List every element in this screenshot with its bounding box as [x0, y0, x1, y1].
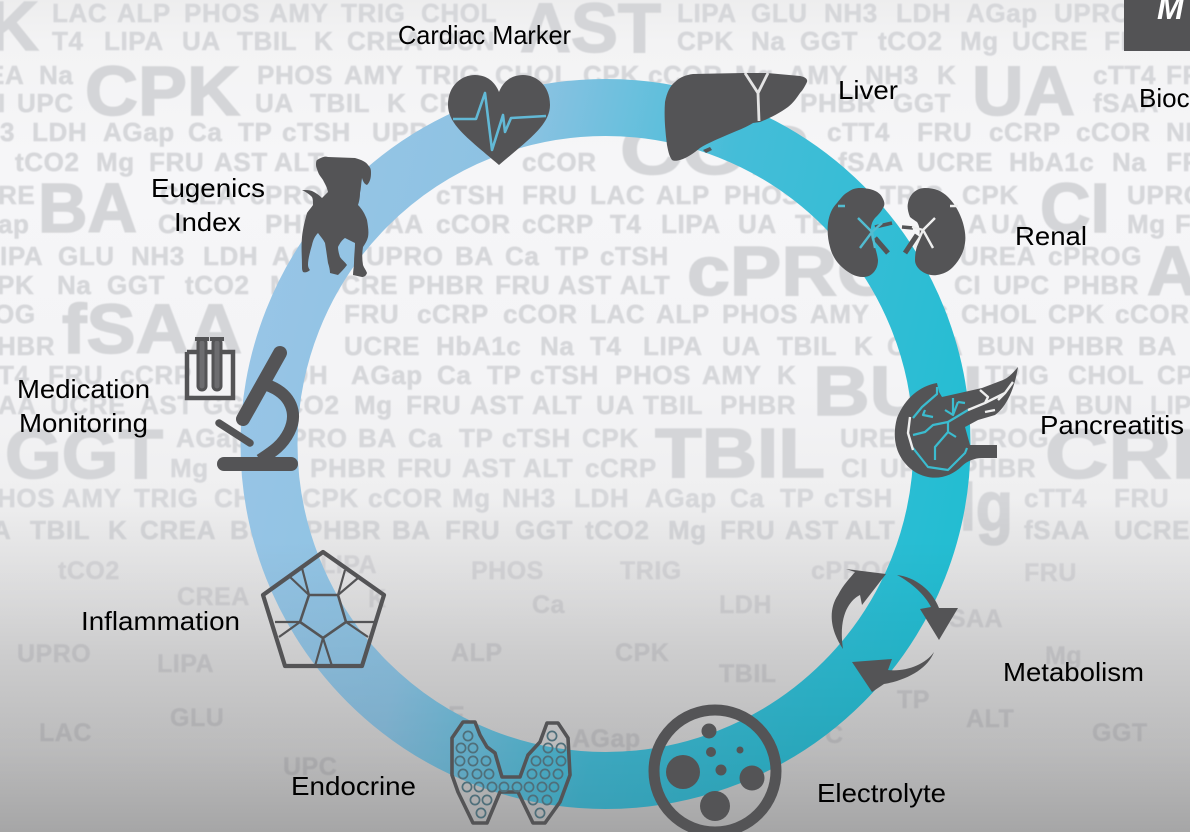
background word cloud of analyte abbreviations: K — [937, 60, 956, 90]
background word cloud of analyte abbreviations: CPK — [962, 180, 1019, 210]
background word cloud of analyte abbreviations: GGT — [203, 390, 261, 420]
background word cloud of analyte abbreviations: BA — [38, 169, 137, 247]
background word cloud of analyte abbreviations: LIPA — [643, 331, 703, 361]
background word cloud of analyte abbreviations: LDH — [203, 241, 258, 271]
background word cloud of analyte abbreviations: FRU — [917, 117, 972, 147]
background word cloud of analyte abbreviations: CPK — [302, 483, 359, 513]
background word cloud of analyte abbreviations: CHOL — [1068, 360, 1144, 390]
background word cloud of analyte abbreviations: cCRP — [989, 117, 1061, 147]
icon: microscope and test tubes (medication monitoring) — [187, 339, 298, 471]
background word cloud of analyte abbreviations: PHBR — [1063, 270, 1139, 300]
background word cloud of analyte abbreviations: LIPA — [661, 209, 721, 239]
background word cloud of analyte abbreviations: cCOR — [1076, 117, 1151, 147]
background word cloud of analyte abbreviations: NH3 — [131, 241, 185, 271]
background word cloud of analyte abbreviations: TRIG — [985, 360, 1050, 390]
background word cloud of analyte abbreviations: AST — [558, 270, 612, 300]
background word cloud of analyte abbreviations: CREA — [887, 331, 963, 361]
background word cloud of analyte abbreviations: CPK — [615, 639, 669, 667]
background word cloud of analyte abbreviations: Mg — [1045, 642, 1082, 670]
background word cloud of analyte abbreviations: Ca — [408, 423, 442, 453]
background word cloud of analyte abbreviations: UCRE — [917, 147, 993, 177]
background word cloud of analyte abbreviations: AGap — [176, 423, 248, 453]
icon: liver — [665, 73, 807, 161]
background word cloud of analyte abbreviations: AGap — [103, 117, 175, 147]
background word cloud of analyte abbreviations: PHOS — [724, 180, 800, 210]
background word cloud of analyte abbreviations: Mg — [452, 483, 491, 513]
background word cloud of analyte abbreviations: Na — [39, 60, 73, 90]
background word cloud of analyte abbreviations: LIPA — [104, 26, 164, 56]
background word cloud of analyte abbreviations: Mg — [96, 147, 135, 177]
background word cloud of analyte abbreviations: UPC — [17, 88, 74, 118]
background word cloud of analyte abbreviations: fSAA — [838, 147, 904, 177]
background word cloud of analyte abbreviations: ALP — [656, 299, 710, 329]
label: renal: Renal — [1015, 221, 1087, 251]
background word cloud of analyte abbreviations: CI — [158, 209, 185, 239]
background word cloud of analyte abbreviations: T4 — [590, 331, 622, 361]
background word cloud of analyte abbreviations: ALP — [451, 639, 502, 667]
label: metabolism: Metabolism — [1003, 657, 1144, 687]
background word cloud of analyte abbreviations: PHBR — [720, 390, 796, 420]
background word cloud of analyte abbreviations: CREA — [347, 26, 423, 56]
background word cloud of analyte abbreviations: FRU — [495, 270, 550, 300]
background word cloud of analyte abbreviations: NH3 — [865, 60, 919, 90]
background word cloud of analyte abbreviations: PHBR — [305, 515, 381, 545]
header box, top right — [1124, 0, 1190, 51]
label: medication monitoring — [17, 374, 150, 438]
background word cloud of analyte abbreviations: GGT — [800, 26, 858, 56]
background word cloud of analyte abbreviations: K — [368, 585, 387, 613]
background word cloud of analyte abbreviations: GGT — [893, 88, 951, 118]
background word cloud of analyte abbreviations: tCO2 — [275, 390, 340, 420]
background word cloud of analyte abbreviations: TBIL — [719, 660, 777, 688]
background word cloud of analyte abbreviations: cCOR — [436, 209, 511, 239]
label: eugenics index — [151, 173, 265, 237]
background word cloud of analyte abbreviations: cCRP — [585, 453, 657, 483]
background word cloud of analyte abbreviations: AGap — [272, 241, 344, 271]
icon: electrolyte circle with particles — [654, 710, 776, 832]
background word cloud of analyte abbreviations: CREA — [420, 88, 496, 118]
background word cloud of analyte abbreviations: fSAA — [1093, 88, 1159, 118]
background word cloud of analyte abbreviations: FRU — [48, 360, 103, 390]
label: inflammation: Inflammation — [81, 606, 240, 636]
background word cloud of analyte abbreviations: FRU — [149, 147, 204, 177]
background word cloud of analyte abbreviations: FRU — [720, 515, 775, 545]
background word cloud of analyte abbreviations: E — [448, 702, 465, 730]
background word cloud of analyte abbreviations: Na — [751, 26, 785, 56]
background word cloud of analyte abbreviations: CI — [1040, 169, 1110, 247]
background word cloud of analyte abbreviations: PHOS — [615, 360, 691, 390]
background word cloud of analyte abbreviations: GLU — [170, 704, 224, 732]
background word cloud of analyte abbreviations: Na — [57, 270, 91, 300]
background word cloud of analyte abbreviations: AMY — [810, 299, 870, 329]
icon: pancreas — [895, 367, 1018, 478]
background word cloud of analyte abbreviations: LDH — [719, 591, 772, 619]
background word cloud of analyte abbreviations: IPA — [0, 241, 43, 271]
background word cloud of analyte abbreviations: PHBR — [265, 209, 341, 239]
background word cloud of analyte abbreviations: K — [387, 88, 406, 118]
background word cloud of analyte abbreviations: K — [854, 331, 873, 361]
background word cloud of analyte abbreviations: K — [314, 26, 333, 56]
background word cloud of analyte abbreviations: TBIL — [795, 209, 855, 239]
label: cardiac marker: Cardiac Marker — [398, 20, 571, 50]
background word cloud of analyte abbreviations: GLU — [58, 241, 115, 271]
background word cloud of analyte abbreviations: Mg — [1127, 209, 1166, 239]
background word cloud of analyte abbreviations: cTSH — [530, 360, 599, 390]
background word cloud of analyte abbreviations: cPROG — [1048, 241, 1142, 271]
background word cloud of analyte abbreviations: AA — [385, 209, 424, 239]
background word cloud of analyte abbreviations: UA — [255, 88, 294, 118]
background word cloud of analyte abbreviations: cTSH — [282, 117, 351, 147]
background word cloud of analyte abbreviations: UCRE — [1012, 26, 1088, 56]
background word cloud of analyte abbreviations: PHBR — [960, 453, 1036, 483]
background word cloud of analyte abbreviations: GGT — [107, 270, 165, 300]
background word cloud of analyte abbreviations: FRU — [406, 390, 461, 420]
background word cloud of analyte abbreviations: cPROG — [811, 557, 901, 585]
background word cloud of analyte abbreviations: Ca — [532, 591, 566, 619]
background word cloud of analyte abbreviations: GGT — [5, 415, 163, 493]
background word cloud of analyte abbreviations: UA — [722, 331, 761, 361]
background word cloud of analyte abbreviations: TP — [238, 117, 272, 147]
label: electrolyte: Electrolyte — [817, 778, 946, 808]
background word cloud of analyte abbreviations: CREA — [177, 583, 250, 611]
background word cloud of analyte abbreviations: PHOS — [257, 60, 333, 90]
label: biochemistry, cut off at page edge: Bioc — [1139, 83, 1190, 113]
background word cloud of analyte abbreviations: cPRO — [687, 232, 897, 310]
background word cloud of analyte abbreviations: BUN — [1075, 390, 1133, 420]
label: eugenics index: Index — [174, 207, 241, 237]
background word cloud of analyte abbreviations: TBIL — [643, 390, 703, 420]
background word cloud of analyte abbreviations: tCO2 — [185, 270, 250, 300]
background word cloud of analyte abbreviations: UREA — [840, 423, 916, 453]
background word cloud of analyte abbreviations: ALP — [656, 180, 710, 210]
background word cloud of analyte abbreviations: Mg — [925, 467, 1013, 545]
background word cloud of analyte abbreviations: CREA — [140, 515, 216, 545]
background word cloud of analyte abbreviations: K — [108, 515, 127, 545]
background word cloud of analyte abbreviations: FRU — [445, 515, 500, 545]
background word cloud of analyte abbreviations: Mg — [735, 60, 774, 90]
label: medication monitoring: Monitoring — [19, 408, 148, 438]
background word cloud of analyte abbreviations: Ca — [505, 241, 539, 271]
background word cloud of analyte abbreviations: UREA — [960, 241, 1036, 271]
background word cloud of analyte abbreviations: NH3 — [502, 483, 556, 513]
background word cloud of analyte abbreviations: TBIL — [777, 331, 837, 361]
background word cloud of analyte abbreviations: ALT — [620, 270, 670, 300]
background word cloud of analyte abbreviations: Na — [540, 331, 574, 361]
background word cloud of analyte abbreviations: LIPA — [320, 551, 377, 579]
icon: cycling arrows (metabolism) — [832, 569, 958, 692]
background word cloud of analyte abbreviations: TP — [780, 483, 814, 513]
background word cloud of analyte abbreviations: BUN — [437, 26, 495, 56]
background word cloud of analyte abbreviations: COR — [620, 111, 810, 189]
background word cloud of analyte abbreviations: cCRP — [522, 209, 594, 239]
background word cloud of analyte abbreviations: cTT4 — [827, 117, 890, 147]
background word cloud of analyte abbreviations: ALT — [845, 515, 895, 545]
background word cloud of analyte abbreviations: UPC — [283, 753, 337, 781]
background word cloud of analyte abbreviations: UA — [182, 26, 221, 56]
ring: circular blue-to-teal band — [269, 108, 942, 780]
background word cloud of analyte abbreviations: AST — [462, 453, 516, 483]
label: pancreatitis: Pancreatitis — [1040, 410, 1184, 440]
background word cloud of analyte abbreviations: cTSH — [502, 423, 571, 453]
background word cloud of analyte abbreviations: Ca — [437, 360, 471, 390]
label: eugenics index: Eugenics — [151, 173, 265, 203]
background word cloud of analyte abbreviations: ALT — [966, 705, 1014, 733]
background word cloud of analyte abbreviations: Mg — [960, 26, 999, 56]
background word cloud of analyte abbreviations: AST — [214, 147, 268, 177]
background word cloud of analyte abbreviations: T4 — [52, 26, 84, 56]
background word cloud of analyte abbreviations: CRE — [1045, 415, 1190, 493]
background word cloud of analyte abbreviations: CHOL — [214, 483, 290, 513]
label: liver: Liver — [838, 75, 898, 105]
background word cloud of analyte abbreviations: UA — [972, 52, 1075, 130]
background word cloud of analyte abbreviations: fSAA — [62, 290, 242, 368]
background word cloud of analyte abbreviations: BA — [455, 241, 494, 271]
background word cloud of analyte abbreviations: Mg — [668, 515, 707, 545]
background word cloud of analyte abbreviations: GGT — [515, 515, 573, 545]
background word cloud of analyte abbreviations: FRU — [1114, 483, 1169, 513]
background word cloud of analyte abbreviations: AMY — [702, 360, 762, 390]
background word cloud of analyte abbreviations: Na — [1112, 147, 1146, 177]
background word cloud of analyte abbreviations: cCRP — [417, 299, 489, 329]
background word cloud of analyte abbreviations: cTSH — [824, 483, 893, 513]
background word cloud of analyte abbreviations: cCOR — [1115, 299, 1190, 329]
background word cloud of analyte abbreviations: LAC — [39, 719, 92, 747]
background word cloud of analyte abbreviations: UA — [991, 209, 1030, 239]
background word cloud of analyte abbreviations: CI — [841, 453, 868, 483]
background word cloud of analyte abbreviations: TRIG — [885, 299, 950, 329]
background word cloud of analyte abbreviations: AST — [785, 515, 839, 545]
background word cloud of analyte abbreviations: LDH — [32, 117, 87, 147]
icon: pentagon cell network (inflammation) — [263, 552, 384, 666]
background word cloud of analyte abbreviations: HbA1c — [436, 331, 521, 361]
background word cloud of analyte abbreviations: cCOR — [522, 147, 597, 177]
background word cloud of analyte abbreviations: AMY — [344, 60, 404, 90]
background word cloud of analyte abbreviations: BA — [358, 423, 397, 453]
background word cloud of analyte abbreviations: K — [777, 360, 796, 390]
background word cloud of analyte abbreviations: 3 — [0, 117, 15, 147]
background word cloud of analyte abbreviations: BUN — [230, 515, 288, 545]
background word cloud of analyte abbreviations: UCRE — [322, 270, 398, 300]
background word cloud of analyte abbreviations: BA — [1138, 331, 1177, 361]
background word cloud of analyte abbreviations: UCRE — [1114, 515, 1190, 545]
background word cloud of analyte abbreviations: fSAA — [940, 605, 1003, 633]
background word cloud of analyte abbreviations: ALT — [523, 453, 573, 483]
background word cloud of analyte abbreviations: AST — [470, 390, 524, 420]
background word cloud of analyte abbreviations: FRU — [344, 299, 399, 329]
background word cloud of analyte abbreviations: cTSH — [436, 180, 505, 210]
background word cloud of analyte abbreviations: cCRP — [120, 360, 192, 390]
background word cloud of analyte abbreviations: Ca — [730, 483, 764, 513]
background word cloud of analyte abbreviations: UCRE — [344, 331, 420, 361]
background word cloud of analyte abbreviations: TBIL — [237, 26, 297, 56]
background word cloud of analyte abbreviations: cTSH — [600, 241, 669, 271]
background word cloud of analyte abbreviations: cCOR — [368, 483, 443, 513]
icon: thyroid gland (endocrine) — [452, 722, 570, 823]
background word cloud of analyte abbreviations: Mg — [354, 390, 393, 420]
background word cloud of analyte abbreviations: fSAA — [1024, 515, 1090, 545]
background word cloud of analyte abbreviations: TBIL — [310, 88, 370, 118]
background word cloud of analyte abbreviations: Mg — [170, 453, 209, 483]
background word cloud of analyte abbreviations: PHBR — [408, 270, 484, 300]
background word cloud of analyte abbreviations: HbA1c — [1009, 147, 1094, 177]
background word cloud of analyte abbreviations: LAC — [590, 180, 645, 210]
background word cloud of analyte abbreviations: CPK — [583, 60, 640, 90]
icon: kidneys (renal) — [828, 188, 965, 277]
background word cloud of analyte abbreviations: UPRO — [17, 640, 91, 668]
background word cloud of analyte abbreviations: CHOL — [961, 299, 1037, 329]
label: medication monitoring: Medication — [17, 374, 150, 404]
background word cloud of analyte abbreviations: cTT4 — [1024, 483, 1087, 513]
background word cloud of analyte abbreviations: tCO2 — [15, 147, 80, 177]
background word cloud of analyte abbreviations: cCOR — [648, 60, 723, 90]
background word cloud of analyte abbreviations: T4 — [610, 209, 642, 239]
background word cloud of analyte abbreviations: tCO2 — [585, 515, 650, 545]
background word cloud of analyte abbreviations: UREA — [990, 390, 1066, 420]
icon: dog silhouette (eugenics index) — [302, 157, 371, 277]
background word cloud of analyte abbreviations: UPRO — [366, 241, 444, 271]
background word cloud of analyte abbreviations: FRU — [1024, 559, 1077, 587]
background word cloud of analyte abbreviations: AGap — [351, 360, 423, 390]
background word cloud of analyte abbreviations: AMY — [62, 483, 122, 513]
background word cloud of analyte abbreviations: UPC — [880, 453, 937, 483]
background word cloud of analyte abbreviations: UA — [738, 209, 777, 239]
background word cloud of analyte abbreviations: TBIL — [30, 515, 90, 545]
background word cloud of analyte abbreviations: PHBR — [1048, 331, 1124, 361]
background word cloud of analyte abbreviations: LDH — [273, 360, 328, 390]
background word cloud of analyte abbreviations: LIPA — [157, 650, 214, 678]
background word cloud of analyte abbreviations: ALT — [532, 390, 582, 420]
background word cloud of analyte abbreviations: cPROG — [250, 180, 344, 210]
background word cloud of analyte abbreviations: BUN — [813, 352, 983, 430]
background word cloud of analyte abbreviations: A — [968, 209, 987, 239]
background word cloud of analyte abbreviations: TRIG — [416, 60, 481, 90]
background word cloud of analyte abbreviations: TRIG — [620, 557, 682, 585]
background word cloud of analyte abbreviations: TRIG — [134, 483, 199, 513]
background word cloud of analyte abbreviations: tCO2 — [58, 557, 120, 585]
background word cloud of analyte abbreviations: GGT — [1092, 719, 1148, 747]
background word cloud of analyte abbreviations: CPK — [85, 52, 240, 130]
label: endocrine: Endocrine — [291, 771, 416, 801]
background word cloud of analyte abbreviations: PHBR — [310, 453, 386, 483]
background word cloud of analyte abbreviations: AGap — [572, 725, 641, 753]
background word cloud of analyte abbreviations: LDH — [574, 483, 629, 513]
icon: heart with pulse (cardiac marker) — [448, 75, 550, 165]
background word cloud of analyte abbreviations: FRU — [397, 453, 452, 483]
background word cloud of analyte abbreviations: CPK — [677, 26, 734, 56]
background word cloud of analyte abbreviations: TRIG — [880, 180, 945, 210]
background word cloud of analyte abbreviations: PHBR — [800, 88, 876, 118]
background word cloud of analyte abbreviations: AMY — [788, 60, 848, 90]
background word cloud of analyte abbreviations: Ca — [188, 117, 222, 147]
background word cloud of analyte abbreviations: PHOS — [722, 299, 798, 329]
background word cloud of analyte abbreviations: Mg — [270, 270, 309, 300]
background word cloud of analyte abbreviations: FRU — [1104, 26, 1159, 56]
background word cloud of analyte abbreviations: UA — [596, 390, 635, 420]
background word cloud of analyte abbreviations: cCOR — [503, 299, 578, 329]
background word cloud of analyte abbreviations: AGap — [645, 483, 717, 513]
background word cloud of analyte abbreviations: UPRO — [372, 117, 450, 147]
background word cloud of analyte abbreviations: CPK — [582, 423, 639, 453]
background word cloud of analyte abbreviations: TP — [897, 686, 930, 714]
background word cloud of analyte abbreviations: UCRE — [50, 390, 126, 420]
background word cloud of analyte abbreviations: LAC — [590, 299, 645, 329]
background word cloud of analyte abbreviations: UPRO — [270, 423, 348, 453]
background word cloud of analyte abbreviations: cPROG — [955, 423, 1049, 453]
background word cloud of analyte abbreviations: BA — [392, 515, 431, 545]
background word cloud of analyte abbreviations: C — [825, 721, 844, 749]
background word cloud of analyte abbreviations: PHOS — [471, 557, 544, 585]
background word cloud of analyte abbreviations: tCO2 — [878, 26, 943, 56]
background word cloud of analyte abbreviations: TP — [555, 241, 589, 271]
background word cloud of analyte abbreviations: UPC — [993, 270, 1050, 300]
background word cloud of analyte abbreviations: AST — [140, 390, 194, 420]
background word cloud of analyte abbreviations: CHOL — [495, 60, 571, 90]
background word cloud of analyte abbreviations: FRU — [522, 180, 577, 210]
background word cloud of analyte abbreviations: cTT4 — [1093, 60, 1156, 90]
background word cloud of analyte abbreviations: BUN — [977, 331, 1035, 361]
background word cloud of analyte abbreviations: ALT — [274, 147, 324, 177]
background word cloud of analyte abbreviations: CI — [954, 270, 981, 300]
background word cloud of analyte abbreviations: CPK — [1048, 299, 1105, 329]
background word cloud of analyte abbreviations: TP — [487, 360, 521, 390]
background word cloud of analyte abbreviations: TP — [459, 423, 493, 453]
background word cloud of analyte abbreviations: CREA — [160, 180, 236, 210]
background word cloud of analyte abbreviations: TBIL — [655, 414, 825, 492]
